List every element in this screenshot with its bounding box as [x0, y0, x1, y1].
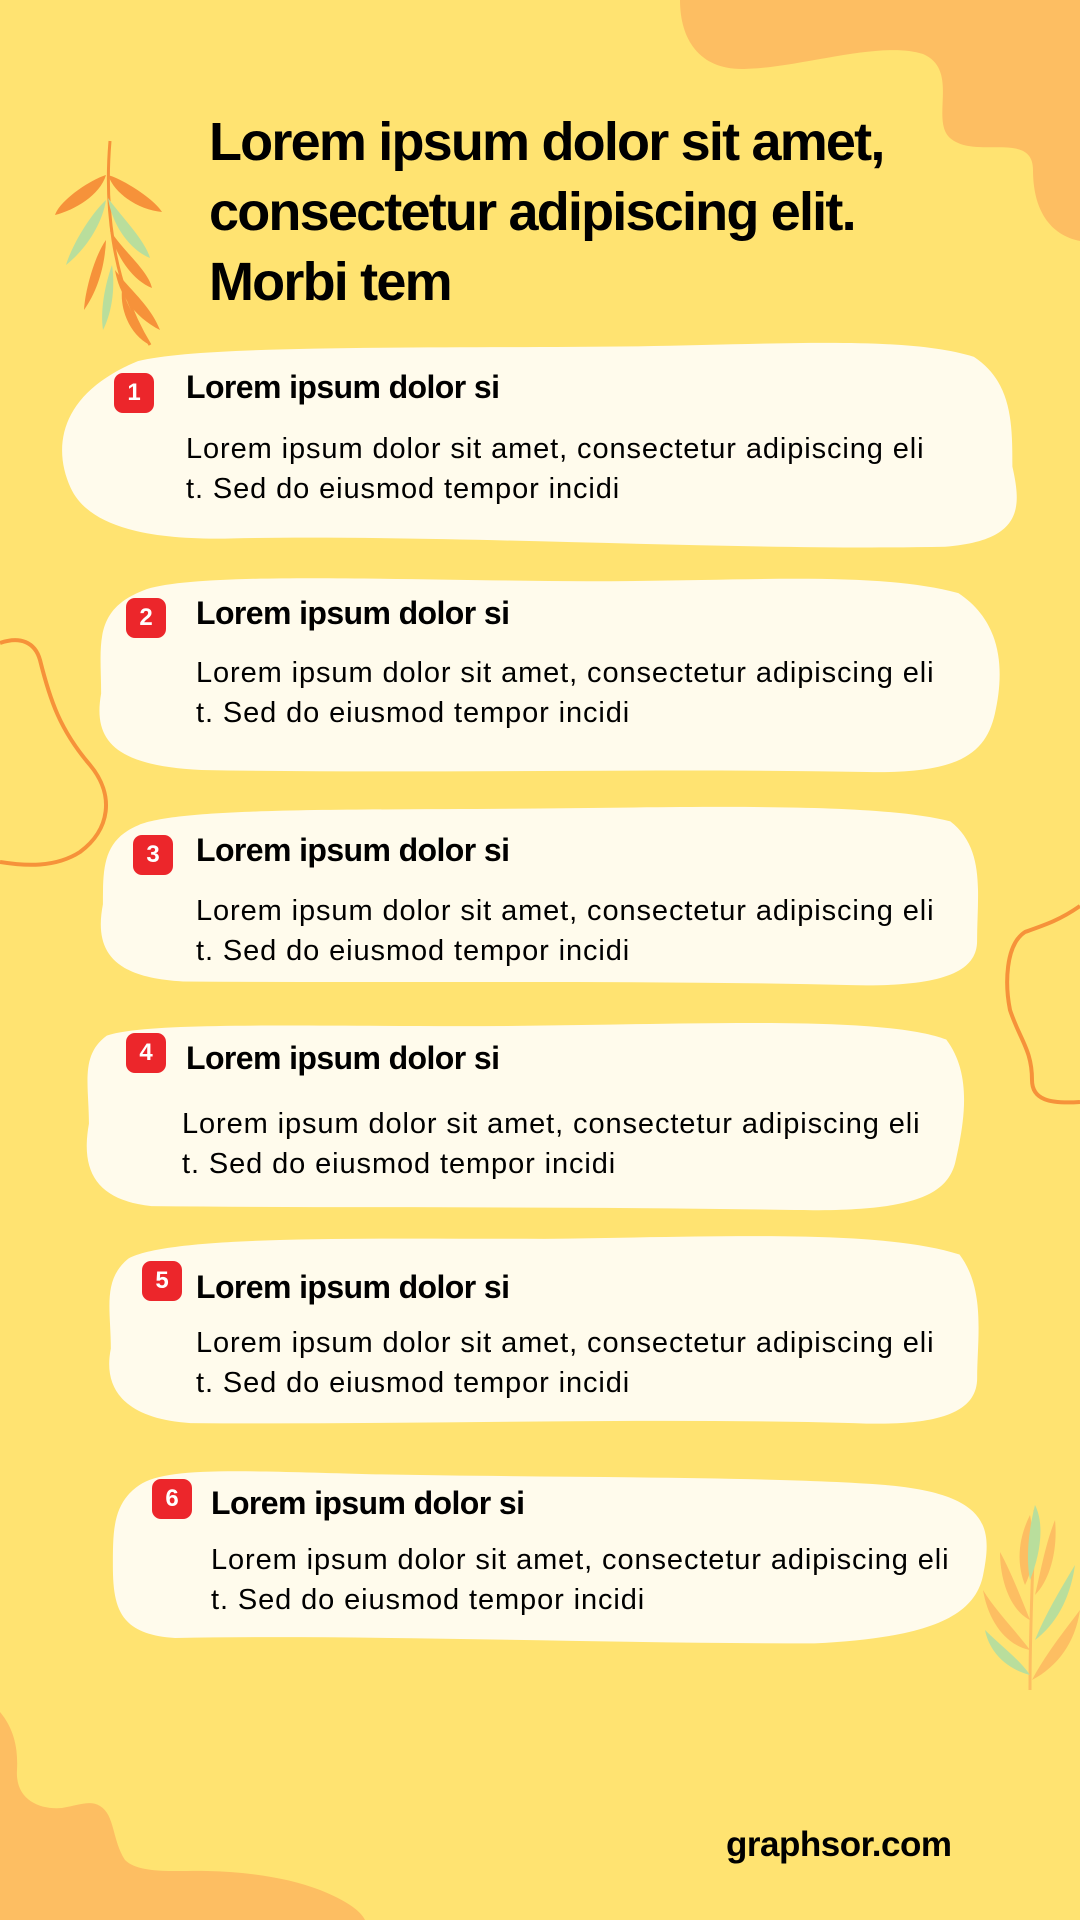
badge 1: [114, 373, 154, 413]
body 3: Lorem ipsum dolor sit amet, consectetur adipiscing eli: [196, 895, 934, 927]
body 4: [182, 1108, 920, 1180]
squiggle: right: [1005, 904, 1080, 1104]
badge 1: 1: [127, 379, 141, 406]
body 5: Lorem ipsum dolor sit amet, consectetur adipiscing eli: [196, 1327, 934, 1359]
body 4: t. Sed do eiusmod tempor incidi: [182, 1148, 616, 1180]
body 6: Lorem ipsum dolor sit amet, consectetur adipiscing eli: [211, 1544, 949, 1576]
badge 4: 4: [139, 1039, 153, 1066]
icon: leaf branch bottom-right: [983, 1505, 1080, 1690]
body 3: [196, 895, 934, 967]
badge 5: [142, 1261, 182, 1301]
heading 2: Lorem ipsum dolor si: [196, 595, 509, 631]
badge 3: 3: [146, 841, 160, 868]
badge 3: [133, 835, 173, 875]
heading 4: Lorem ipsum dolor si: [186, 1040, 499, 1076]
badge 5: 5: [155, 1267, 169, 1294]
body 3: t. Sed do eiusmod tempor incidi: [196, 935, 630, 967]
panel: card 5: [109, 1236, 979, 1424]
squiggle: left: [0, 638, 108, 867]
badge 2: [126, 598, 166, 638]
title: [209, 112, 884, 312]
badge 4: [126, 1033, 166, 1073]
panel: card 6: [112, 1471, 987, 1644]
title: Morbi tem: [209, 252, 451, 312]
body 1: [186, 433, 924, 505]
title: Lorem ipsum dolor sit amet,: [209, 112, 884, 172]
panel: card 3: [100, 806, 978, 986]
body 1: Lorem ipsum dolor sit amet, consectetur adipiscing eli: [186, 433, 924, 465]
panel: card 4: [86, 1023, 964, 1210]
panel: card 1: [62, 342, 1017, 548]
body 6: [211, 1544, 949, 1616]
badge 6: 6: [165, 1485, 179, 1512]
footer: brand: graphsor.com: [726, 1825, 951, 1864]
body 4: Lorem ipsum dolor sit amet, consectetur adipiscing eli: [182, 1108, 920, 1140]
body 2: Lorem ipsum dolor sit amet, consectetur adipiscing eli: [196, 657, 934, 689]
heading 1: Lorem ipsum dolor si: [186, 369, 499, 405]
body 2: [196, 657, 934, 729]
blob: top-right: [680, 0, 1080, 241]
badge 6: [152, 1479, 192, 1519]
panel: card 2: [99, 578, 1000, 772]
badge 2: 2: [139, 604, 153, 631]
body 6: t. Sed do eiusmod tempor incidi: [211, 1584, 645, 1616]
heading 5: Lorem ipsum dolor si: [196, 1269, 509, 1305]
body 5: [196, 1327, 934, 1399]
blob: bottom-left: [0, 1712, 365, 1920]
title: consectetur adipiscing elit.: [209, 182, 855, 242]
heading 3: Lorem ipsum dolor si: [196, 832, 509, 868]
heading 6: Lorem ipsum dolor si: [211, 1485, 524, 1521]
body 2: t. Sed do eiusmod tempor incidi: [196, 697, 630, 729]
icon: leaf branch top-left: [55, 140, 162, 346]
body 5: t. Sed do eiusmod tempor incidi: [196, 1367, 630, 1399]
body 1: t. Sed do eiusmod tempor incidi: [186, 473, 620, 505]
